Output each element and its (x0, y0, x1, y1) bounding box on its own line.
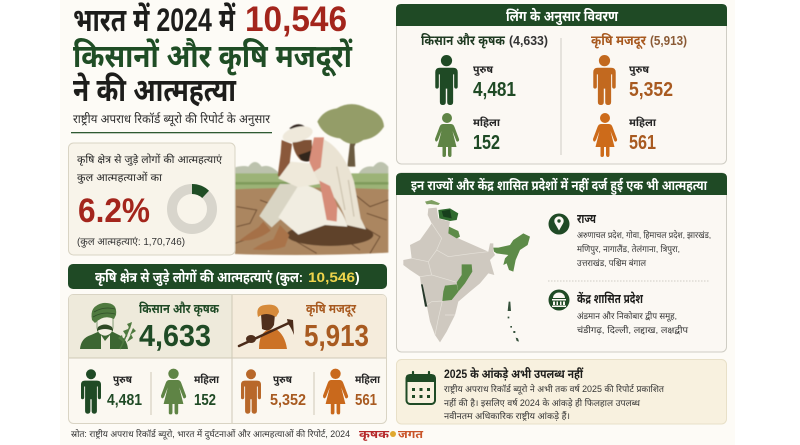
labourer male stat: पुरुष (273, 375, 293, 386)
sleeve (278, 162, 319, 187)
labourer column heading: (5,913) (650, 33, 687, 48)
banner: total: 10,546 (308, 269, 355, 285)
farmer male stat (81, 369, 142, 414)
title: किसानों और कृषि मजदूरों (73, 38, 353, 77)
labourer count: 5,913 (304, 318, 369, 353)
front leg (278, 184, 347, 235)
Himachal core (442, 210, 452, 218)
distant trees (235, 162, 388, 174)
logo (359, 429, 423, 442)
Andaman and Nicobar islands (508, 302, 519, 342)
logo: जगत (398, 429, 423, 441)
cracked soil (235, 188, 388, 255)
Chhattisgarh area (457, 264, 472, 292)
face (292, 140, 313, 161)
labourer male (593, 55, 673, 105)
farmer male stat: 4,481 (107, 392, 142, 409)
title: 10,546 (245, 0, 347, 39)
labourer female (593, 113, 657, 157)
farmer male stat: पुरुष (113, 375, 133, 386)
labourer male: 5,352 (629, 79, 673, 101)
Himachal and Kashmir highlight (438, 208, 458, 221)
farmer male: पुरुष (473, 64, 493, 77)
states list (577, 230, 711, 268)
icon: farmer (80, 303, 136, 349)
Ladakh (425, 200, 440, 205)
man's shadow (287, 224, 373, 246)
turban (281, 124, 314, 145)
farmer female stat: 152 (194, 392, 216, 409)
Goa coast (421, 284, 427, 307)
state borders (412, 223, 488, 335)
shirt (308, 139, 366, 229)
title: भारत में 2024 में (73, 2, 236, 38)
farmer female: 152 (473, 132, 500, 154)
raised forearm (278, 140, 292, 178)
share sublabel: कुल आत्महत्याओं का (77, 171, 162, 184)
labourer female stat (323, 369, 381, 414)
North-east states (493, 233, 530, 272)
beard (298, 150, 313, 162)
scarf lower (319, 181, 337, 222)
banner: total: कृषि क्षेत्र से जुड़े लोगों की आत्महत्याएं (कुल: (95, 268, 303, 287)
farmer male (435, 55, 516, 105)
farmer column heading: (4,633) (509, 33, 548, 48)
front foot (253, 225, 289, 250)
logo: कृषक (359, 429, 390, 442)
zero suicides header (396, 173, 727, 195)
title (73, 0, 353, 108)
icon: farm labourer (239, 305, 294, 349)
labourer female: 561 (629, 132, 656, 154)
notice body: नहीं की है। इसलिए वर्ष 2024 के आंकड़े ही फिलहाल उपलब्ध (444, 397, 641, 409)
notice body: राष्ट्रीय अपराध रिकॉर्ड ब्यूरो ने अभी तक वर्ष 2025 की रिपोर्ट प्रकाशित (444, 383, 665, 395)
farmer female stat: महिला (194, 374, 220, 386)
states list: अरुणाचल प्रदेश, गोवा, हिमाचल प्रदेश, झारखंड, (577, 230, 711, 240)
back foot (239, 222, 271, 241)
panel: gender breakdown (396, 4, 727, 164)
icon: government building (548, 290, 570, 310)
shirt fold (337, 167, 354, 217)
percentage: 6.2% (78, 192, 150, 230)
Uttarakhand (448, 227, 460, 238)
farmer column heading (421, 32, 548, 50)
states list: मणिपुर, नागालैंड, तेलंगाना, त्रिपुरा, (577, 244, 680, 255)
banner: total (68, 264, 387, 289)
scarf upper (309, 137, 324, 173)
farmer male: 4,481 (473, 79, 516, 101)
farmer count: 4,633 (139, 318, 211, 353)
union territories list: अंडमान और निकोबार द्वीप समूह, (577, 311, 677, 322)
donut chart (172, 184, 212, 229)
labourer column heading: कृषि मजदूर (591, 32, 647, 50)
farmer female: महिला (473, 116, 501, 129)
notice heading: 2025 के आंकड़े अभी उपलब्ध नहीं (444, 366, 584, 381)
share label: कृषि क्षेत्र से जुड़े लोगों की आत्महत्याएं (77, 153, 222, 166)
labourer male: पुरुष (629, 64, 649, 77)
title: ने की आत्महत्या (73, 72, 236, 108)
hair (289, 124, 306, 132)
gender panel header: लिंग के अनुसार विवरण (506, 7, 619, 26)
banner: total: ) (355, 269, 360, 285)
labourer male stat (241, 369, 306, 414)
notice body: नवीनतम अधिकारिक राष्ट्रीय आंकड़े हैं। (444, 410, 570, 422)
total suicides: (कुल आत्महत्याएं: 1,70,746) (77, 236, 185, 248)
labourer female stat: महिला (355, 374, 381, 386)
Telangana area (442, 284, 458, 301)
illustration: distressed farmer on cracked land (235, 104, 388, 255)
union territories list (577, 311, 688, 335)
tree (317, 104, 384, 167)
union territories heading: केंद्र शासित प्रदेश (577, 291, 643, 306)
states heading: राज्य (577, 212, 597, 226)
notice body (444, 383, 665, 422)
panel: share of suicides (68, 143, 235, 255)
green field (235, 173, 388, 192)
panel: category breakdown (68, 294, 386, 424)
states list: उत्तराखंड, पश्चिम बंगाल (577, 258, 646, 268)
labourer male stat: 5,352 (270, 392, 306, 409)
back leg (259, 184, 302, 227)
panel: 2025 data notice (396, 360, 726, 424)
map of India (403, 200, 530, 342)
labourer category label: कृषि मजदूर (306, 301, 356, 317)
farmer column heading: किसान और कृषक (421, 32, 506, 50)
union territories list: चंडीगढ़, दिल्ली, लद्दाख, लक्षद्वीप (577, 325, 688, 335)
labourer female stat: 561 (355, 392, 377, 409)
farmer female stat (161, 369, 220, 414)
farmer category label: किसान और कृषक (139, 301, 219, 317)
field shade (235, 182, 388, 185)
icon: location pin (548, 214, 570, 234)
gender panel header (396, 4, 727, 26)
panel: regions with zero suicides (396, 173, 727, 352)
labourer column heading (591, 32, 687, 50)
subtitle: राष्ट्रीय अपराध रिकॉर्ड ब्यूरो की रिपोर्ट के अनुसार (73, 111, 271, 127)
soil cracks (235, 193, 388, 253)
labourer female: महिला (629, 116, 657, 129)
source note: स्रोत: राष्ट्रीय अपराध रिकॉर्ड ब्यूरो, भारत में दुर्घटनाओं और आत्महत्याओं की रिपोर्ट, 2024 (71, 428, 350, 440)
icon: calendar (406, 372, 436, 404)
farmer female (435, 113, 501, 157)
zero suicides header: इन राज्यों और केंद्र शासित प्रदेशों में नहीं दर्ज हुई एक भी आत्महत्या (411, 176, 708, 195)
